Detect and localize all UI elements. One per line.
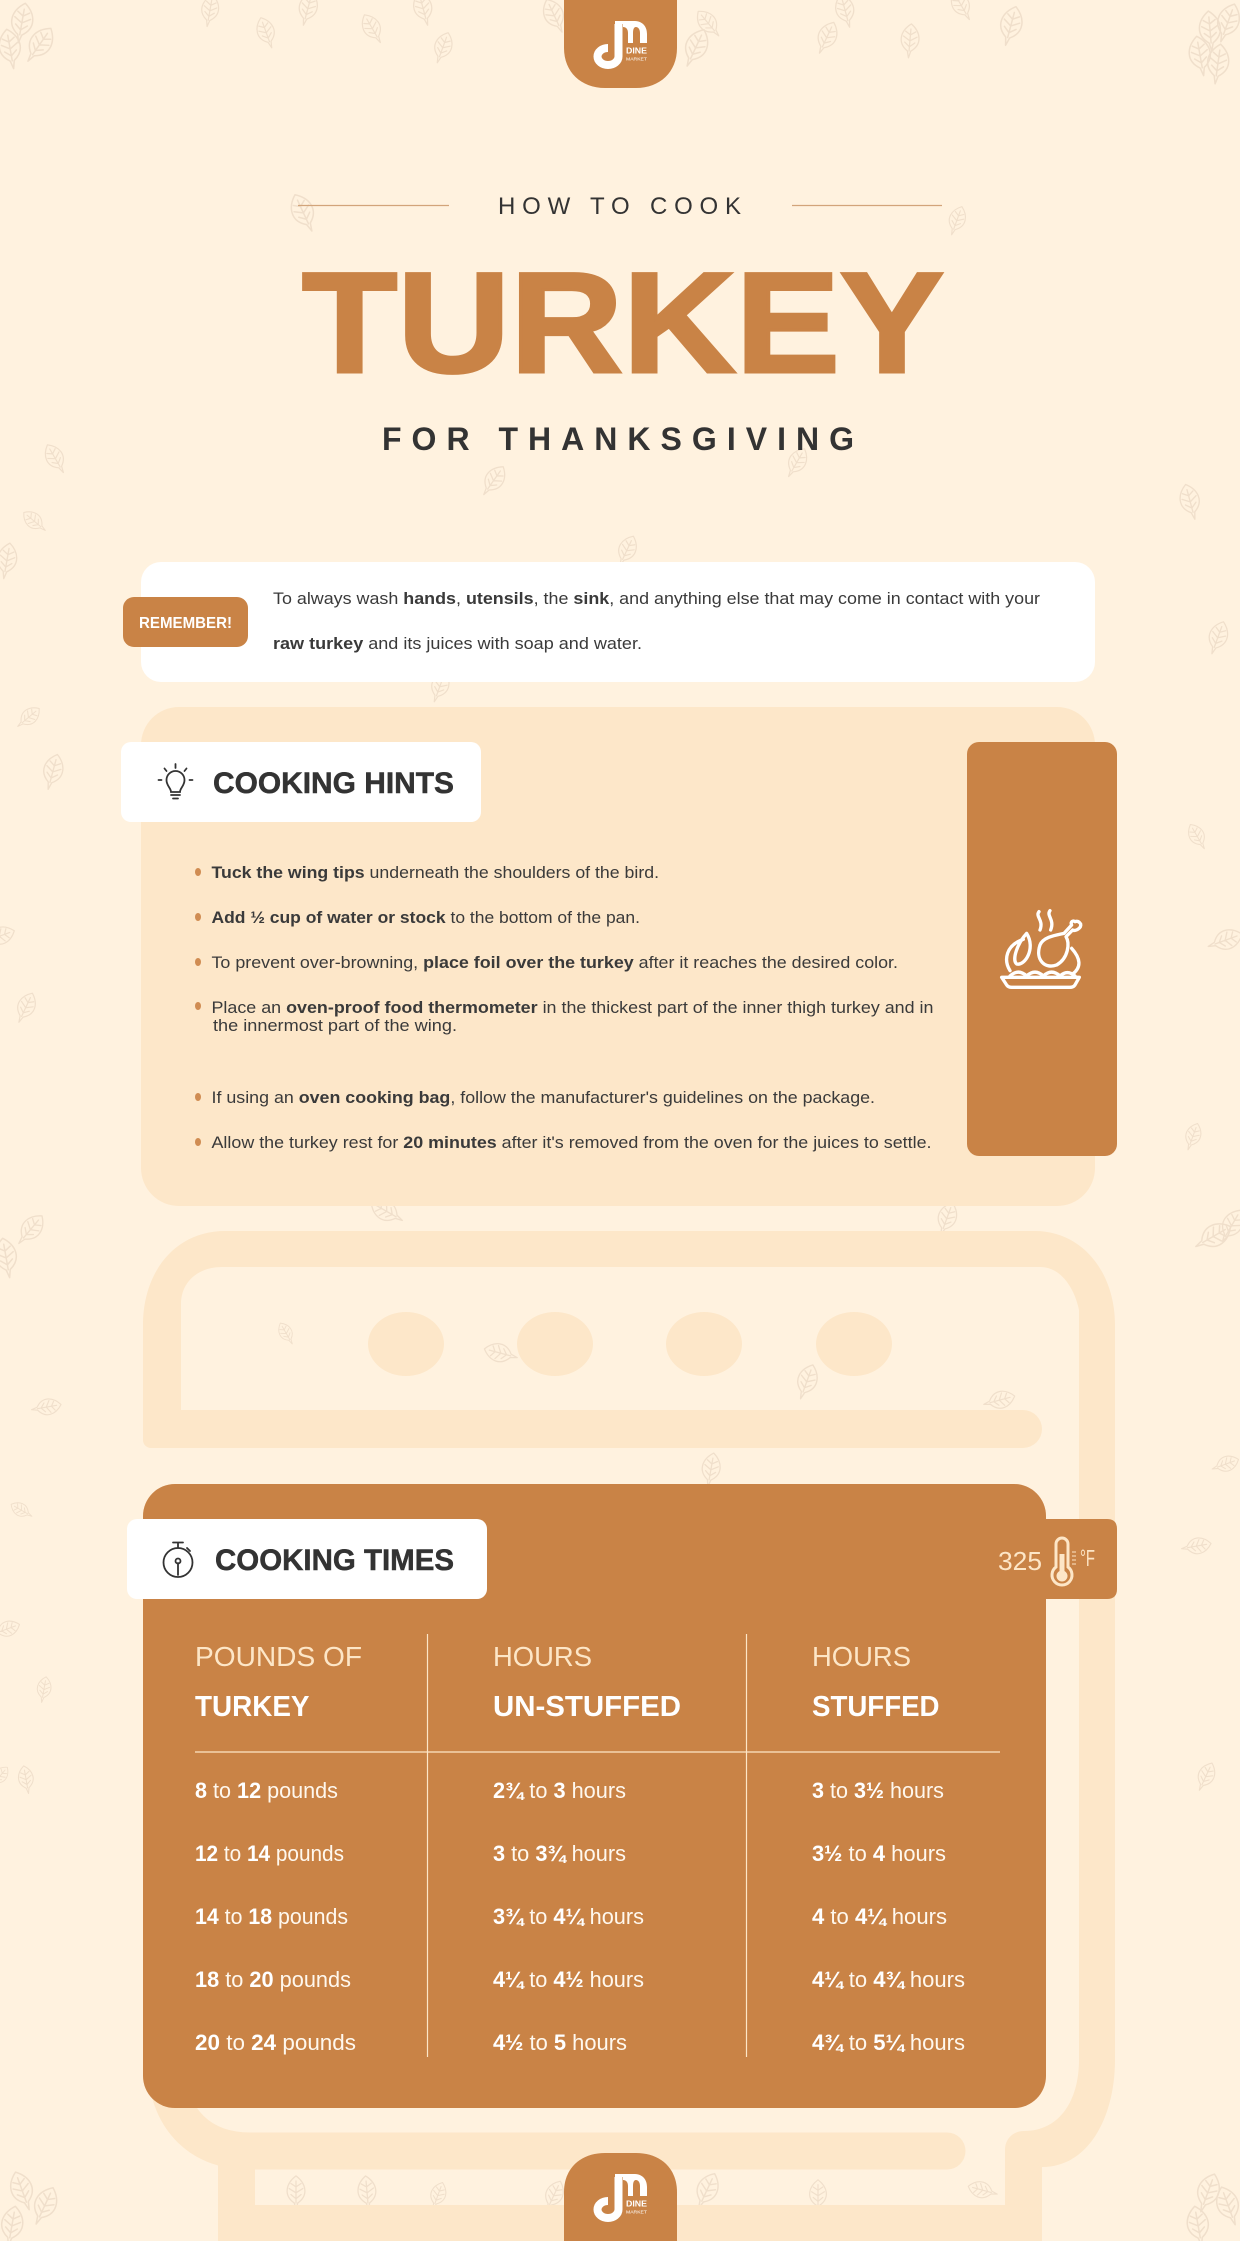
- hints list: If using an oven cooking bag , follow the manufacturer's guidelines on the package.: [212, 1089, 875, 1107]
- oven outline illustration: [143, 1231, 1115, 2241]
- hints heading label: [121, 742, 481, 822]
- table rows: 3½ to 4 hours: [812, 1841, 946, 1866]
- hints heading label: COOKING HINTS: [213, 767, 454, 800]
- temperature tab: 325: [998, 1546, 1042, 1576]
- table rows: 4¾ to 5¼ hours: [812, 2030, 965, 2055]
- top logo badge: [564, 0, 677, 88]
- table headers: POUNDS OF: [195, 1641, 362, 1672]
- times heading label: [127, 1519, 487, 1599]
- table headers: TURKEY: [195, 1691, 310, 1723]
- table rows: 12 to 14 pounds: [195, 1841, 344, 1866]
- title block: FOR THANKSGIVING: [382, 421, 854, 457]
- table headers: UN-STUFFED: [493, 1691, 681, 1723]
- orange side panel with turkey icon: [967, 742, 1117, 1156]
- title block: [298, 193, 944, 457]
- table headers: STUFFED: [812, 1691, 940, 1723]
- hints list: Place an oven-proof food thermometer in the thickest part of the inner thigh turkey and in: [212, 999, 934, 1017]
- top logo badge: MARKET: [626, 56, 647, 62]
- panel: cooking times: [127, 1484, 1117, 2108]
- table rows: 3 to 3¾ hours: [493, 1841, 626, 1866]
- table rows: 18 to 20 pounds: [195, 1967, 351, 1992]
- remember panel: REMEMBER!: [139, 615, 232, 632]
- table headers: HOURS: [812, 1641, 911, 1672]
- hints list: the innermost part of the wing.: [213, 1017, 457, 1035]
- hints list: Allow the turkey rest for 20 minutes after it's removed from the oven for the juices to settle.: [212, 1134, 932, 1152]
- title block: TURKEY: [302, 242, 944, 403]
- table rules: [195, 1634, 1000, 2057]
- temperature tab: [998, 1519, 1117, 1599]
- temperature tab: °F: [1080, 1545, 1095, 1571]
- remember panel: raw turkey and its juices with soap and water.: [273, 635, 642, 653]
- remember panel: To always wash hands, utensils , the sink, and anything else that may come in contact with your: [273, 590, 1041, 608]
- top logo badge: DINE: [626, 46, 648, 56]
- table rows: [195, 1778, 965, 2055]
- bottom logo badge: [564, 2153, 677, 2241]
- table rows: 3¾ to 4¼ hours: [493, 1904, 644, 1929]
- title block: HOW TO COOK: [498, 193, 741, 220]
- table rows: 14 to 18 pounds: [195, 1904, 348, 1929]
- hints list: Tuck the wing tips underneath the shoulders of the bird.: [212, 864, 659, 882]
- bottom logo badge: DINE: [626, 2200, 648, 2208]
- bottom logo badge: MARKET: [626, 2210, 647, 2214]
- table rows: 4 to 4¼ hours: [812, 1904, 947, 1929]
- table rows: 4½ to 5 hours: [493, 2030, 627, 2055]
- table headers: HOURS: [493, 1641, 592, 1672]
- table rows: 8 to 12 pounds: [195, 1778, 338, 1803]
- table rows: 2¾ to 3 hours: [493, 1778, 626, 1803]
- panel: cooking hints: [121, 707, 1117, 1206]
- table headers: [195, 1641, 940, 1723]
- table rows: 4¼ to 4½ hours: [493, 1967, 644, 1992]
- times heading label: COOKING TIMES: [215, 1544, 454, 1577]
- hints list: [195, 864, 934, 1152]
- hints list: Add ½ cup of water or stock to the bottom of the pan.: [212, 909, 640, 927]
- table rows: 20 to 24 pounds: [195, 2030, 356, 2055]
- hints list: To prevent over-browning, place foil over the turkey after it reaches the desired color.: [212, 954, 898, 972]
- table rows: 3 to 3½ hours: [812, 1778, 944, 1803]
- table rows: 4¼ to 4¾ hours: [812, 1967, 965, 1992]
- remember panel: [123, 562, 1095, 682]
